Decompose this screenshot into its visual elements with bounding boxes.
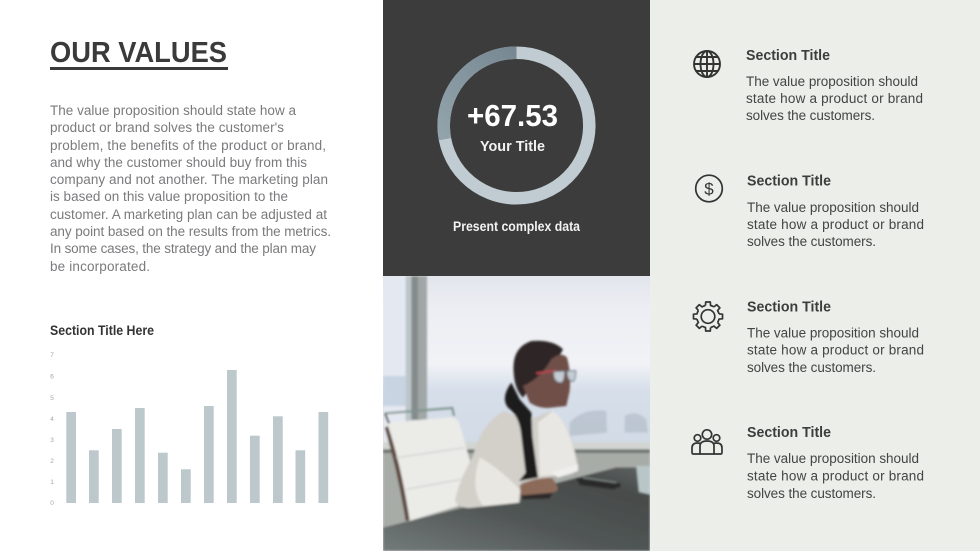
chart axis labels: 3: [50, 437, 54, 444]
item text: state how a product or brand: [747, 217, 924, 232]
text block: intro paragraph: company and not another. The marketing plan: [50, 172, 328, 187]
item: settings: [693, 300, 924, 375]
item text: state how a product or brand: [747, 342, 924, 358]
bar chart: [50, 352, 328, 507]
text block: intro paragraph: product or brand solves the customer's: [50, 120, 284, 135]
text block: intro paragraph: be incorporated.: [50, 259, 150, 274]
chart axis labels: [50, 352, 54, 507]
item heading: Section Title: [746, 48, 830, 64]
icon: globe: [694, 51, 720, 77]
item text: The value proposition should: [746, 74, 918, 89]
item text: [747, 200, 924, 249]
item text: [747, 451, 924, 501]
chart bars: [66, 370, 328, 503]
text block: intro paragraph: In some cases, the strategy and the plan may: [50, 241, 316, 256]
chart axis labels: 0: [50, 500, 54, 507]
chart axis labels: 4: [50, 416, 54, 423]
donut chart: [444, 53, 589, 198]
item text: The value proposition should: [747, 200, 919, 215]
text block: intro paragraph: is based on this value proposition to the: [50, 189, 288, 204]
item text: The value proposition should: [747, 451, 919, 466]
item text: solves the customers.: [746, 108, 875, 123]
item text: [747, 326, 924, 375]
text block: intro paragraph: any point based on the results from the metrics.: [50, 224, 331, 239]
icon: gear: [693, 302, 723, 331]
item text: The value proposition should: [747, 326, 919, 340]
title: OUR VALUES: [50, 37, 227, 69]
text block: intro paragraph: customer. A marketing plan can be adjusted at: [50, 207, 327, 222]
metric value: +67.53: [467, 99, 558, 133]
text block: intro paragraph: and why the customer should buy from this: [50, 155, 307, 170]
item text: state how a product or brand: [746, 91, 923, 106]
icon: people: [692, 430, 722, 454]
panel: right column background: [650, 0, 980, 551]
item text: solves the customers.: [747, 360, 876, 375]
item text: [746, 74, 923, 123]
item: global: [694, 48, 923, 123]
chart axis labels: 6: [50, 374, 54, 380]
icon: dollar coin: $: [704, 180, 714, 198]
chart axis labels: 1: [50, 479, 54, 486]
item heading: Section Title: [747, 300, 831, 316]
item heading: Section Title: [747, 425, 831, 441]
item text: state how a product or brand: [747, 468, 924, 484]
chart axis labels: 5: [50, 395, 54, 402]
item text: solves the customers.: [747, 234, 876, 249]
panel: dark metric background: [383, 0, 650, 276]
item text: solves the customers.: [747, 486, 876, 501]
chart axis labels: 2: [50, 458, 54, 465]
metric label: Your Title: [480, 139, 545, 155]
item: finance: [696, 174, 924, 249]
text block: intro paragraph: The value proposition should state how a: [50, 103, 296, 118]
photo: woman at a meeting table: [383, 276, 650, 551]
item heading: Section Title: [747, 174, 831, 190]
heading: chart title: Section Title Here: [50, 323, 154, 338]
chart axis labels: 7: [50, 352, 54, 359]
icon: dollar coin: [696, 175, 722, 202]
text block: intro paragraph: problem, the benefits of the product or brand,: [50, 138, 326, 153]
metric caption: Present complex data: [453, 219, 580, 234]
item: team: [692, 425, 924, 501]
text block: intro paragraph: [50, 103, 331, 274]
